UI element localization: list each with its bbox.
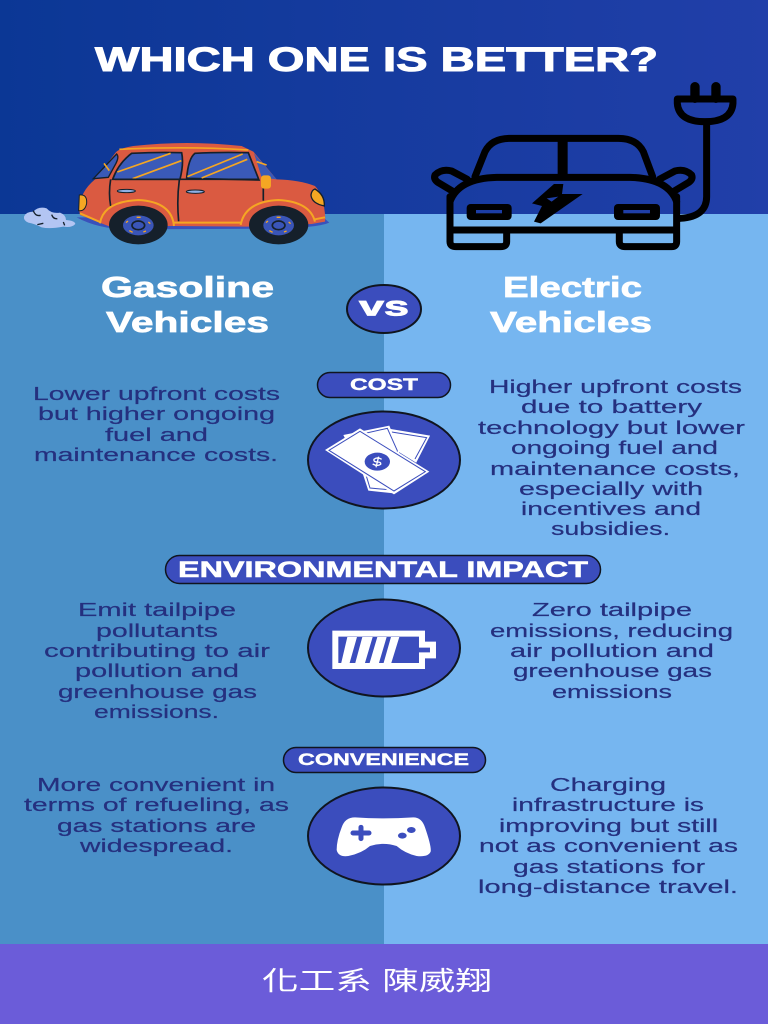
text: electric cost: technology but lower — [478, 417, 745, 438]
text: gasoline convenience: gas stations are — [57, 815, 256, 836]
text: electric convenience: infrastructure is — [512, 794, 704, 815]
icon: battery — [308, 600, 460, 696]
icon: red gasoline car — [77, 143, 329, 244]
text: electric environmental impact: greenhouse gas — [513, 660, 712, 681]
label: environmental impact: ENVIRONMENTAL IMPACT — [178, 557, 589, 582]
text: electric cost: maintenance costs, — [490, 458, 740, 479]
title: WHICH ONE IS BETTER? — [95, 41, 658, 79]
text: electric cost: ongoing fuel and — [511, 437, 718, 458]
heading: gasoline vehicles — [101, 272, 274, 339]
text: electric cost: subsidies. — [551, 518, 670, 539]
text: gasoline cost: fuel and — [105, 424, 208, 445]
text: gasoline environmental impact: pollutants — [96, 620, 218, 641]
footer band — [0, 944, 768, 1024]
label: cost — [318, 372, 450, 398]
heading: gasoline vehicles: Gasoline — [101, 272, 274, 304]
label: convenience — [284, 748, 486, 772]
text: electric cost — [478, 376, 745, 539]
text: gasoline cost: Lower upfront costs — [33, 383, 280, 404]
text: gasoline environmental impact: Emit tailpipe — [78, 599, 236, 620]
background: gasoline panel — [0, 214, 384, 944]
text: gasoline environmental impact: contributing to air — [44, 640, 270, 661]
text: electric environmental impact — [490, 599, 733, 702]
vs badge: vs — [359, 290, 409, 322]
label: cost: COST — [350, 375, 419, 394]
label: convenience: CONVENIENCE — [298, 750, 469, 769]
text: gasoline cost: maintenance costs. — [34, 444, 278, 465]
label: environmental impact — [166, 556, 600, 584]
text: electric convenience: improving but still — [499, 815, 718, 836]
text: gasoline environmental impact: pollution and — [75, 660, 239, 681]
background: header band — [0, 0, 768, 214]
text: electric cost: Higher upfront costs — [489, 376, 742, 397]
heading: electric vehicles: Electric — [503, 272, 642, 304]
text: electric convenience: Charging — [550, 774, 666, 795]
icon: electric car with plug — [435, 87, 733, 247]
icon: banknotes — [308, 412, 460, 508]
text: electric environmental impact: air pollution and — [510, 640, 714, 661]
text: electric cost: due to battery — [521, 396, 703, 417]
background: electric panel — [384, 214, 768, 944]
heading: electric vehicles: Vehicles — [490, 307, 652, 339]
text: electric cost: especially with — [519, 478, 703, 499]
icon: exhaust cloud — [24, 208, 75, 228]
text: gasoline convenience: terms of refueling, as — [24, 794, 289, 815]
vs badge — [347, 285, 421, 333]
text: electric environmental impact: Zero tailpipe — [532, 599, 692, 620]
heading: gasoline vehicles: Vehicles — [106, 307, 269, 339]
text: electric convenience: not as convenient as — [479, 835, 738, 856]
text: electric convenience: gas stations for — [513, 856, 705, 877]
text: gasoline environmental impact: emissions. — [94, 701, 219, 722]
heading: electric vehicles — [490, 272, 652, 339]
footer text: 化工系 陳威翔 — [262, 966, 492, 996]
icon: game controller — [308, 788, 460, 884]
text: electric environmental impact: emissions, reducing — [490, 620, 733, 641]
text: electric environmental impact: emissions — [552, 681, 672, 702]
text: electric convenience — [478, 774, 738, 897]
text: electric cost: incentives and — [521, 498, 701, 519]
text: electric convenience: long-distance travel. — [478, 876, 738, 897]
text: gasoline convenience: widespread. — [78, 835, 233, 856]
text: gasoline convenience: More convenient in — [37, 774, 275, 795]
text: gasoline environmental impact: greenhouse gas — [58, 681, 257, 702]
text: gasoline convenience — [24, 774, 289, 856]
text: gasoline environmental impact — [44, 599, 270, 722]
text: gasoline cost — [33, 383, 280, 465]
text: gasoline cost: but higher ongoing — [38, 403, 275, 424]
